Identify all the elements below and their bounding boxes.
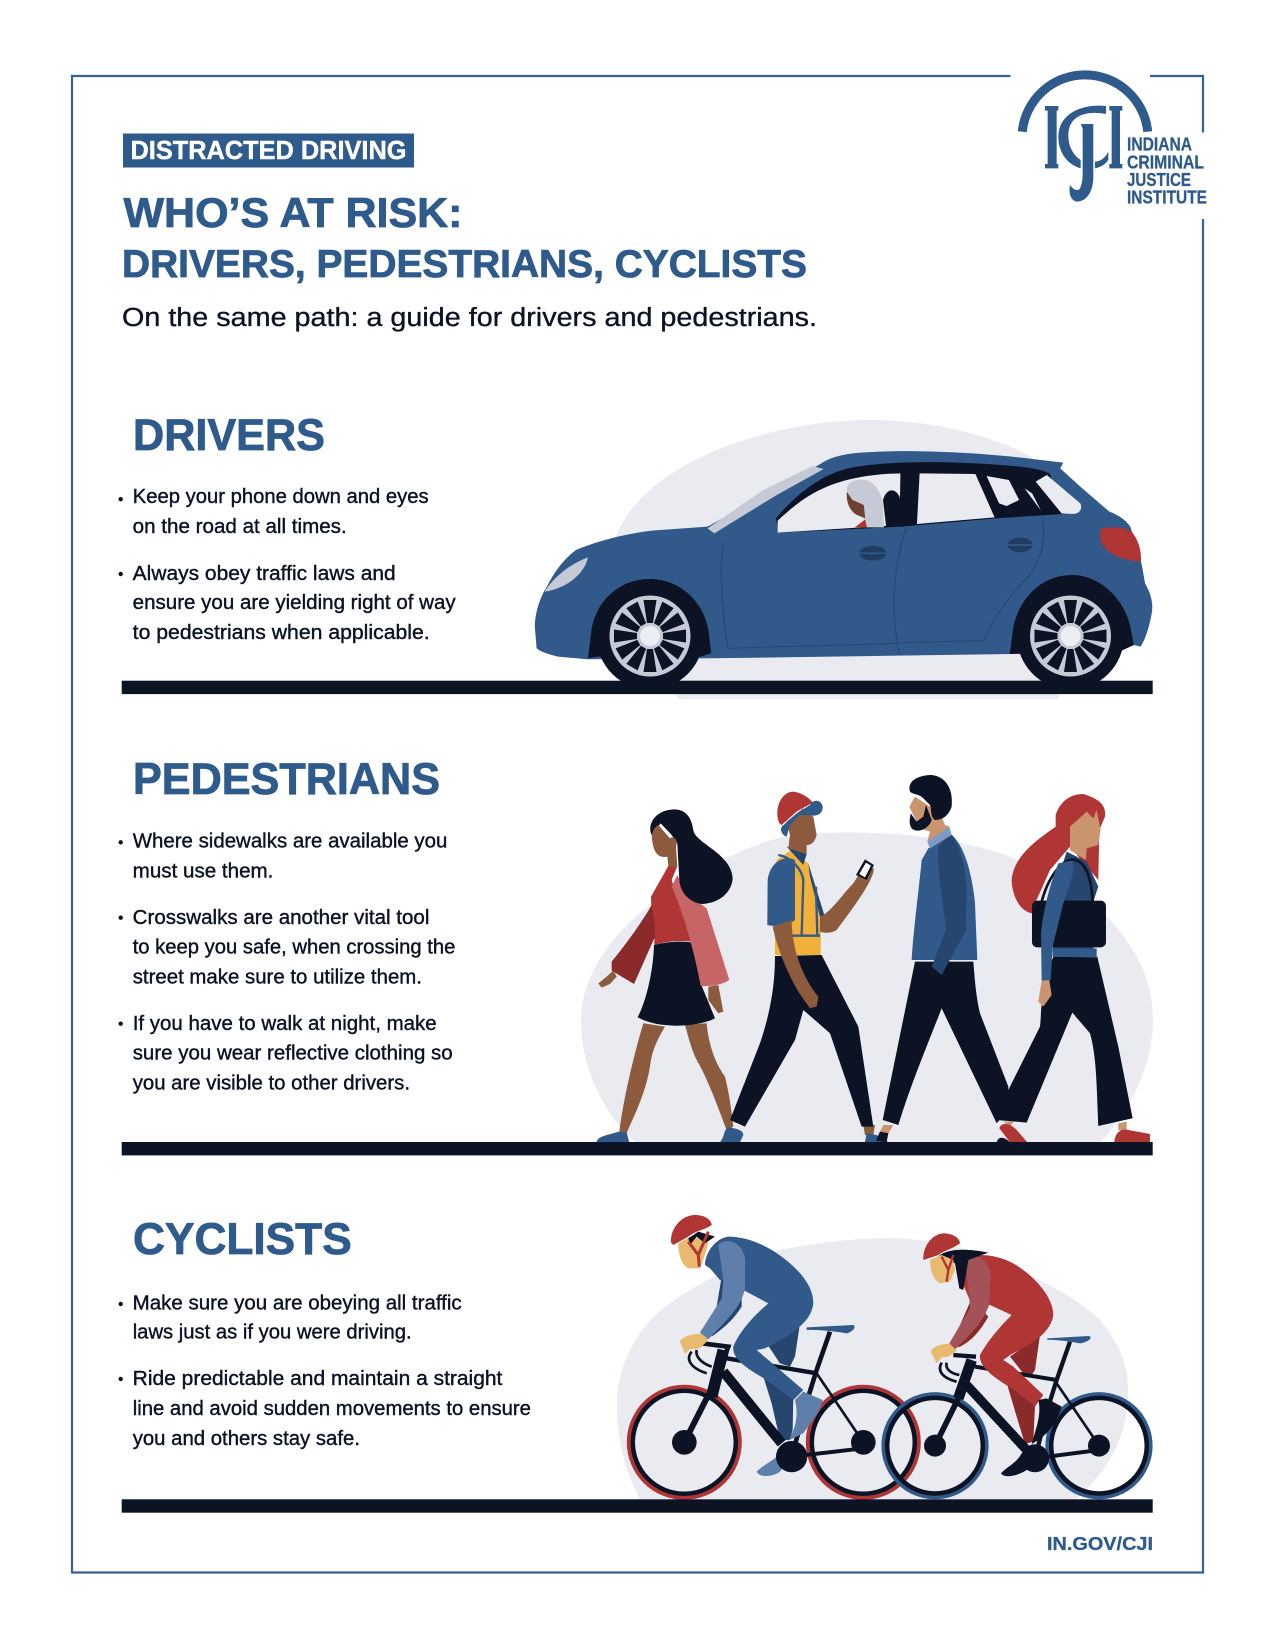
logo wordmark: INDIANA [1127,134,1192,155]
pedestrian tips: Where sidewalks are available you [133,829,447,852]
road: pedestrians [122,1142,1153,1155]
title: WHO’S AT RISK: [124,189,462,236]
badge: distracted driving: DISTRACTED DRIVING [130,137,406,165]
panel: cyclists [118,1215,1153,1513]
driver tips: Keep your phone down and eyes [133,485,429,508]
panel: pedestrians [118,755,1153,1155]
pedestrians backdrop [581,832,1153,1143]
car backdrop [616,420,1080,699]
car body [535,451,1152,659]
title [122,189,807,286]
head and helmet [938,1250,988,1290]
driver [847,480,904,527]
logo monogram ICJI [1045,106,1122,202]
header [122,134,817,332]
cyclist tips [118,1291,531,1450]
driver tips: ensure you are yielding right of way [133,591,456,614]
rear door window [917,473,995,524]
logo arch [1022,75,1148,132]
heading: cyclists: CYCLISTS [133,1215,352,1264]
heading: drivers: DRIVERS [133,411,325,460]
body [712,1277,742,1337]
cyclist tips: laws just as if you were driving. [133,1320,412,1343]
illustration: cyclists [617,1215,1151,1500]
logo wordmark: JUSTICE [1127,169,1191,190]
body [950,1298,988,1348]
head and helmet [678,1237,708,1268]
pedestrian tips: If you have to walk at night, make [133,1012,437,1035]
cyclist tips: you and others stay safe. [133,1427,360,1450]
panel: drivers [118,411,1153,699]
bicycle frame [672,1332,876,1472]
tail light [1100,527,1141,562]
pedestrian tips: must use them. [133,859,273,882]
title: DRIVERS, PEDESTRIANS, CYCLISTS [122,243,807,286]
illustration: car [535,420,1152,699]
logo wordmark: CRIMINAL [1127,151,1204,172]
pedestrian tips: street make sure to utilize them. [133,965,422,988]
logo wordmark [1127,134,1207,207]
pedestrian tips: Crosswalks are another vital tool [133,906,429,929]
woman with red hair and bag [997,794,1150,1142]
rear leg [757,1457,787,1476]
driver tips: to pedestrians when applicable. [133,621,430,644]
bicycle frame [924,1342,1110,1472]
door seams [721,517,1044,655]
subtitle: On the same path: a guide for drivers and pedestrians. [122,304,817,332]
driver tips [118,485,456,644]
cyclists backdrop [617,1238,1128,1500]
front wheel [596,582,704,690]
cyclist tips: Ride predictable and maintain a straight [133,1367,503,1390]
rear quarter windows [987,475,1081,514]
rear wheel [1017,582,1124,690]
headlight [545,557,588,592]
red wheels [629,1387,919,1498]
blue wheels [883,1394,1151,1497]
man with beard [876,775,1008,1142]
window frames [776,462,1063,533]
driver tips: on the road at all times. [133,515,347,538]
road: drivers [122,681,1153,694]
worker with phone [730,792,888,1142]
windshield [708,466,824,533]
cyclist tips: Make sure you are obeying all traffic [133,1291,462,1314]
logo wordmark: INSTITUTE [1127,186,1207,207]
cyclist tips: line and avoid sudden movements to ensure [133,1397,531,1420]
pedestrian tips [118,829,455,1094]
front window [778,473,900,533]
heading: pedestrians: PEDESTRIANS [133,755,440,804]
pedestrian tips: sure you wear reflective clothing so [133,1041,453,1064]
illustration: pedestrians [581,775,1153,1143]
pedestrian tips: you are visible to other drivers. [133,1071,410,1094]
driver tips: Always obey traffic laws and [133,562,396,585]
door handles [857,538,1035,561]
wheel arches [588,575,1134,658]
footer url: IN.GOV/CJI [1047,1533,1153,1554]
cyclist in red [923,1233,1110,1476]
logo: Indiana Criminal Justice Institute [1022,75,1207,207]
pedestrian tips: to keep you safe, when crossing the [133,935,455,958]
cyclist in blue [671,1215,876,1476]
rear leg [1001,1453,1037,1476]
woman with black hair [597,809,743,1142]
road: cyclists [122,1499,1153,1513]
